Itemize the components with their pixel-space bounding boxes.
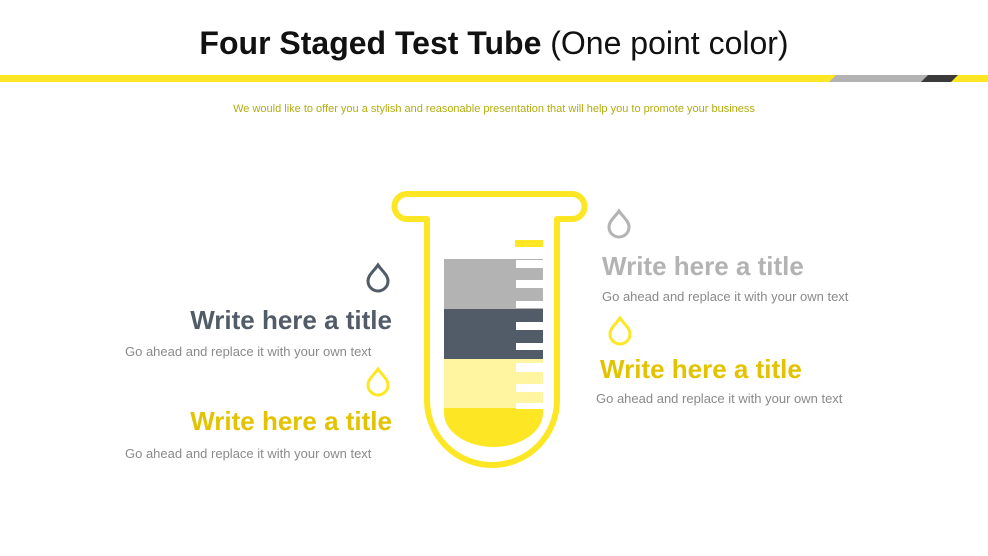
- item: left 2: [125, 406, 392, 461]
- header bar: [0, 75, 988, 82]
- item: right 1: Write here a title: [602, 251, 804, 281]
- icon: drop dark: [366, 262, 390, 292]
- item: left 1: [125, 305, 392, 359]
- subtitle: We would like to offer you a stylish and reasonable presentation that will help you to promote your business: [233, 103, 755, 115]
- title: Four Staged Test Tube (One point color): [199, 25, 789, 61]
- item: right 2: Write here a title: [600, 354, 802, 384]
- icon: drop yellow right: [608, 315, 632, 346]
- item: right 2: Go ahead and replace it with your own text: [596, 391, 842, 406]
- item: right 1: [602, 251, 848, 304]
- item: right 2: [596, 354, 842, 406]
- item: left 1: Go ahead and replace it with your own text: [125, 344, 371, 359]
- item: left 2: Go ahead and replace it with your own text: [125, 446, 371, 461]
- item: right 1: Go ahead and replace it with your own text: [602, 289, 848, 304]
- icon: drop yellow left: [366, 366, 390, 396]
- item: left 1: Write here a title: [190, 305, 392, 335]
- item: left 2: Write here a title: [190, 406, 392, 436]
- icon: drop gray: [608, 208, 630, 238]
